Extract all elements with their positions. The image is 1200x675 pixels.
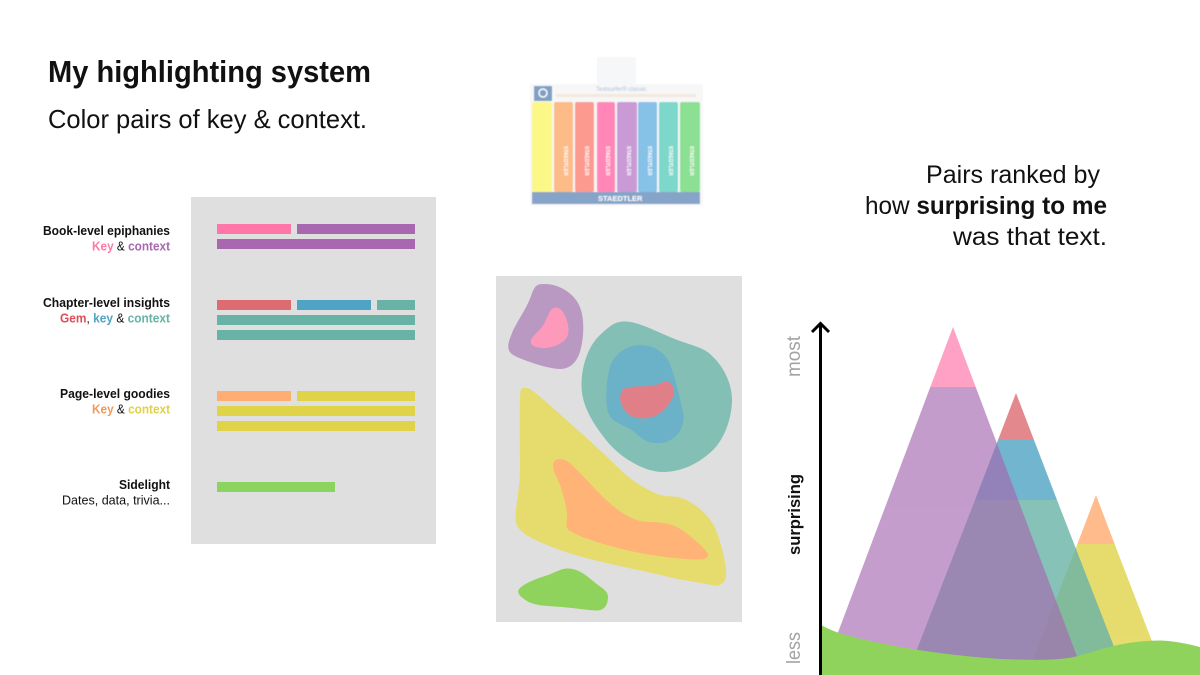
bars: book-level xyxy=(217,224,415,249)
blob: red gem xyxy=(620,381,674,418)
label: chapter-level insights: Gem, key & context xyxy=(60,310,171,326)
highlighter pack photo: Textsurfer® classic xyxy=(596,86,646,93)
label: chapter-level insights: Chapter-level insights xyxy=(43,295,170,310)
label: sidelight xyxy=(62,477,171,508)
label: book-level epiphanies xyxy=(43,223,171,254)
title: My highlighting system xyxy=(48,54,371,89)
ground: green sidelight xyxy=(821,625,1200,675)
axis label: most: most xyxy=(784,335,805,377)
highlighter pack photo: STAEDTLER xyxy=(583,146,589,176)
axis arrow xyxy=(812,324,829,675)
mountain chart xyxy=(821,327,1200,675)
highlighter pack photo: STAEDTLER xyxy=(604,146,610,176)
blob: green sidelight xyxy=(518,568,608,610)
bar: sidelight xyxy=(217,482,335,492)
highlighter pack photo: STAEDTLER xyxy=(598,194,643,203)
panel: page with highlighted lines xyxy=(191,197,436,544)
highlighter pack photo: STAEDTLER xyxy=(667,146,673,176)
highlighter pack photo: STAEDTLER xyxy=(646,146,652,176)
label: page-level goodies: Key & context xyxy=(92,402,171,416)
bars: page-level xyxy=(217,391,415,431)
heading: pairs ranked: was that text. xyxy=(952,223,1107,251)
axis label: surprising: surprising xyxy=(785,474,804,555)
blob: blue key xyxy=(606,345,684,443)
label: sidelight: Dates, data, trivia... xyxy=(62,492,170,508)
bars: chapter-level xyxy=(217,300,415,340)
heading: pairs ranked: how surprising to me xyxy=(865,192,1107,220)
axis label: less: less xyxy=(784,632,805,664)
blob: teal context xyxy=(582,322,732,472)
highlighter pack photo: STAEDTLER xyxy=(562,146,568,176)
highlighter pack photo: STAEDTLER xyxy=(625,146,631,176)
label: page-level goodies xyxy=(60,386,171,416)
mountain: red, blue and teal xyxy=(907,393,1125,675)
label: sidelight: Sidelight xyxy=(119,477,171,492)
label: book-level epiphanies: Book-level epiphanies xyxy=(43,223,170,238)
highlighter pack photo xyxy=(530,57,703,206)
highlighter pack photo: STAEDTLER xyxy=(688,146,694,176)
subtitle: Color pairs of key & context. xyxy=(48,104,367,134)
blob: orange key xyxy=(553,459,708,560)
blob: purple context xyxy=(508,284,583,369)
mountain: yellow and orange xyxy=(1027,495,1165,675)
heading: pairs ranked: Pairs ranked by xyxy=(926,161,1100,189)
blob: pink key xyxy=(531,308,569,348)
label: book-level epiphanies: Key & context xyxy=(92,238,171,254)
mountain: pink and purple xyxy=(822,327,1084,675)
label: chapter-level insights xyxy=(43,295,171,326)
label: page-level goodies: Page-level goodies xyxy=(60,386,170,401)
heading: pairs ranked xyxy=(865,161,1107,251)
panel: page of highlight blobs xyxy=(496,276,742,622)
blob: yellow context xyxy=(516,388,726,586)
